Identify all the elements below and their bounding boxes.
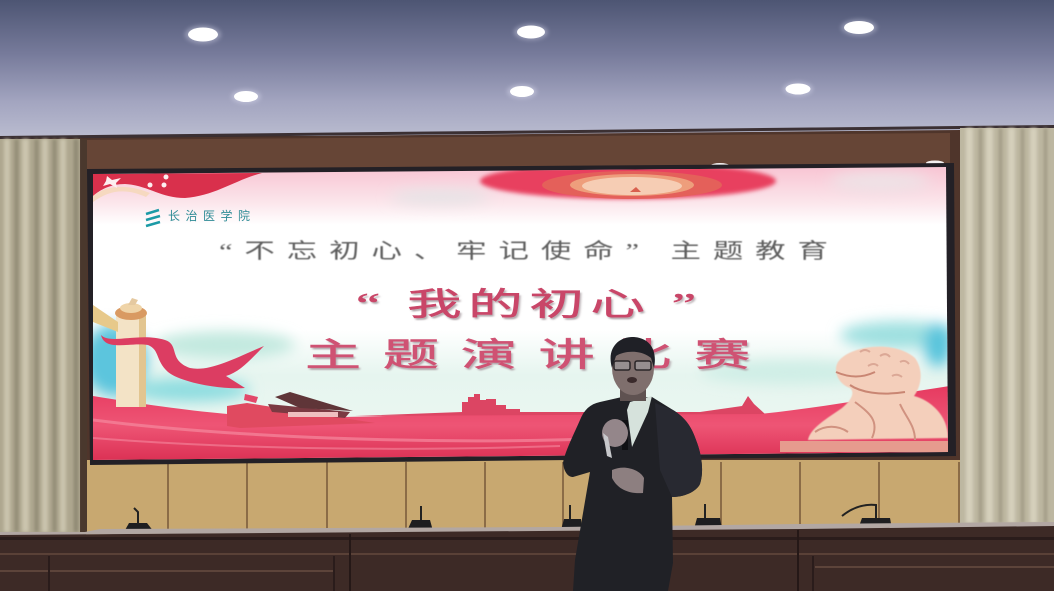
ceiling lights bbox=[185, 20, 877, 104]
screen background bbox=[83, 163, 960, 465]
screen frame bbox=[87, 163, 956, 465]
sky clouds bbox=[83, 172, 960, 402]
microphone bbox=[622, 420, 628, 450]
hand on chest bbox=[612, 468, 644, 493]
huabiao column bbox=[93, 298, 147, 407]
LED screen bbox=[83, 163, 960, 465]
glasses bbox=[614, 361, 651, 370]
wood wall panels bbox=[86, 460, 966, 535]
Tiananmen gate and skyline bbox=[227, 392, 765, 428]
shirt bbox=[627, 396, 652, 447]
subtitle line: “不忘初心、牢记使命” 主题教育 bbox=[219, 240, 828, 263]
right curtain bbox=[960, 128, 1054, 523]
school logo: 长治医学院 bbox=[168, 208, 250, 223]
jacket shading bbox=[655, 403, 702, 497]
stone lion bbox=[780, 347, 950, 452]
wooden wall above the screen bbox=[0, 125, 1054, 470]
hand holding microphone bbox=[602, 419, 628, 458]
left curtain bbox=[0, 139, 87, 532]
main title line 2: 主题演讲比赛 bbox=[307, 339, 752, 375]
flag corner bbox=[93, 173, 262, 202]
main title line 1: “ 我的初心 ” bbox=[356, 286, 696, 322]
table microphones bbox=[124, 504, 892, 532]
school logo bbox=[146, 208, 250, 226]
national emblem bbox=[480, 163, 776, 199]
speaker bbox=[563, 337, 702, 591]
red ribbon band bbox=[90, 386, 950, 465]
ceiling bbox=[0, 0, 1054, 136]
neck and head bbox=[611, 337, 655, 401]
conference table bbox=[0, 522, 1054, 591]
jacket and trousers bbox=[563, 397, 702, 591]
main title line 2: 主题演讲比赛 bbox=[305, 337, 750, 373]
red ribbon around column bbox=[101, 335, 264, 388]
main title line 1: “ 我的初心 ” bbox=[358, 288, 698, 324]
